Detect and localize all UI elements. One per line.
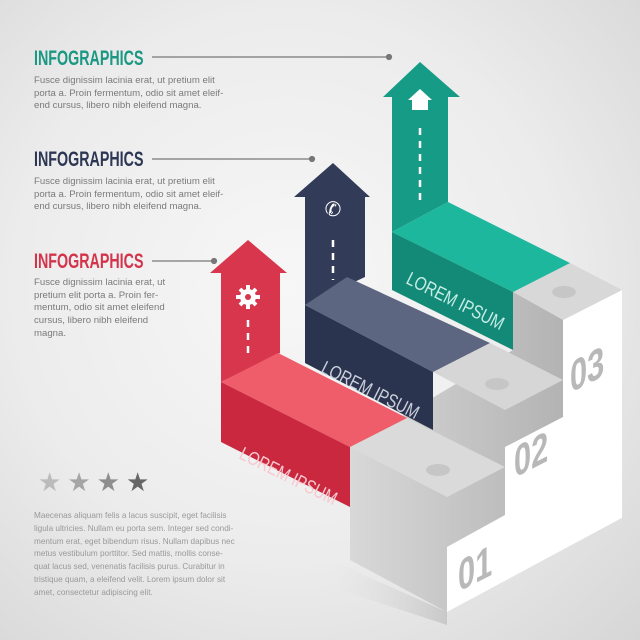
bottom paragraph: amet, consectetur adipiscing elit. <box>34 588 153 597</box>
red arrow step: LOREM IPSUM <box>236 442 341 509</box>
step numbers: 03 <box>570 337 604 403</box>
body text 3: Fusce dignissim lacinia erat, ut <box>34 277 165 288</box>
red arrow step <box>210 240 407 509</box>
bottom paragraph: tristique quam, a eleifend velit. Lorem ipsum dolor sit <box>34 575 225 584</box>
connector lines <box>152 54 392 264</box>
body text 3: cursus, libero nibh eleifend <box>34 315 148 326</box>
heading 1: INFOGRAPHICS <box>34 47 143 70</box>
bottom paragraph: ligula ultricies. Nullam eu porta sem. Integer sed condi- <box>34 524 233 533</box>
heading 2: INFOGRAPHICS <box>34 148 143 171</box>
body text 2: Fusce dignissim lacinia erat, ut pretium elit <box>34 176 215 187</box>
step numbers <box>458 337 604 602</box>
bottom paragraph: Maecenas aliquam felis a lacus suscipit, eget facilisis <box>34 511 226 520</box>
body text 1: porta a. Proin fermentum, odio sit amet eleif- <box>34 88 223 99</box>
body text 3 <box>34 277 166 339</box>
teal arrow step <box>383 62 570 350</box>
bottom paragraph: metus vestibulum porttitor. Sed mattis, mollis conse- <box>34 549 223 558</box>
grey stair block <box>350 263 622 612</box>
step numbers: 01 <box>458 536 492 602</box>
step numbers: 02 <box>514 422 548 488</box>
body text 1: end cursus, libero nibh eleifend magna. <box>34 100 201 111</box>
body text 2: porta a. Proin fermentum, odio sit amet eleif- <box>34 189 223 200</box>
body text 2 <box>34 176 223 212</box>
body text 3: magna. <box>34 328 66 339</box>
bottom paragraph <box>34 511 235 597</box>
body text 3: mentum, odio sit amet eleifend <box>34 302 165 313</box>
teal arrow step: LOREM IPSUM <box>403 267 508 334</box>
body text 1: Fusce dignissim lacinia erat, ut pretium elit <box>34 75 215 86</box>
navy arrow step <box>294 163 490 430</box>
stars: ★★★★ <box>38 467 155 497</box>
body text 1 <box>34 75 223 111</box>
body text 3: pretium elit porta a. Proin fer- <box>34 290 158 301</box>
heading 3: INFOGRAPHICS <box>34 250 143 273</box>
bottom paragraph: mentum erat, eget bibendum risus. Nullam dapibus nec <box>34 537 235 546</box>
body text 2: end cursus, libero nibh eleifend magna. <box>34 201 201 212</box>
shadow <box>330 560 447 625</box>
navy arrow step: ✆ <box>325 199 341 221</box>
white step faces <box>447 290 622 612</box>
bottom paragraph: quat lacus sed, venenatis facilisis purus. Curabitur in <box>34 562 225 571</box>
navy arrow step: LOREM IPSUM <box>318 356 423 423</box>
